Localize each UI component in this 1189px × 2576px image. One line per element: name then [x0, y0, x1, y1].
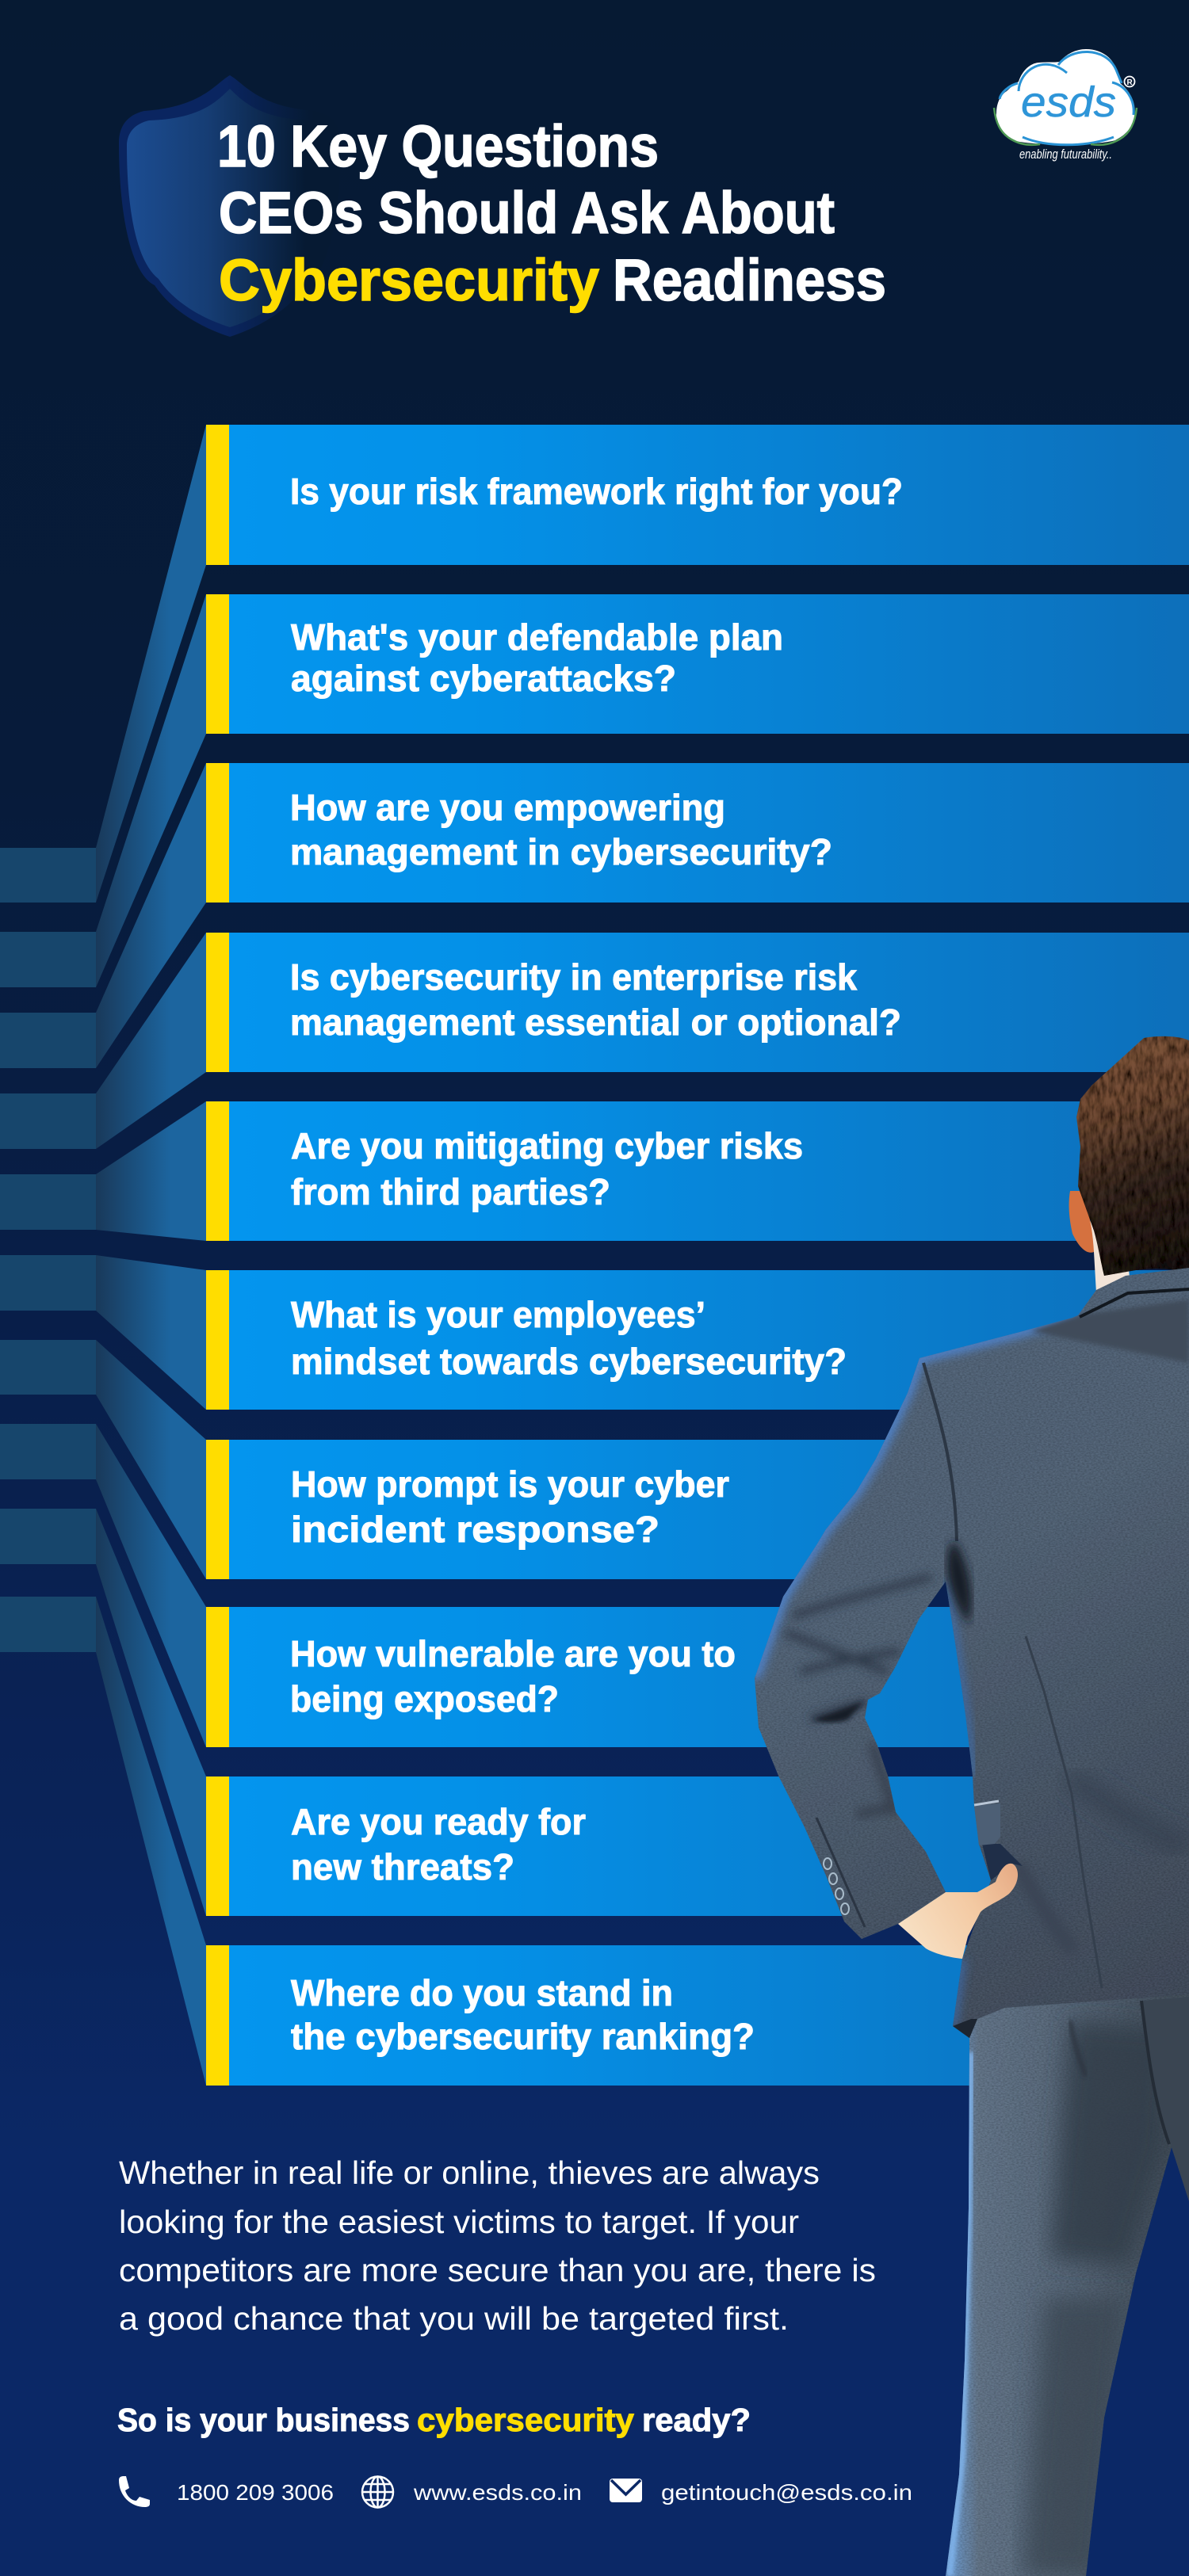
question 7: How prompt is your cyber [291, 1464, 729, 1505]
question 10: the cybersecurity ranking? [291, 2016, 755, 2057]
icon: shield [119, 75, 341, 337]
title: CEOs Should Ask About [219, 180, 835, 246]
question 6 [206, 1270, 1189, 1410]
question 8: being exposed? [290, 1678, 559, 1719]
question 6: What is your employees’ [291, 1294, 705, 1335]
question 2: What's your defendable plan [291, 616, 783, 658]
cloud outline arcs [1000, 52, 1134, 145]
trousers [946, 1981, 1189, 2576]
lining and sleeve vent [974, 1801, 1023, 1880]
question 7: incident response? [291, 1509, 659, 1550]
question 10 [206, 1945, 1189, 2086]
question bars [206, 425, 1189, 2086]
question 3: management in cybersecurity? [290, 831, 832, 872]
title: 10 Key Questions [217, 113, 659, 179]
question 8 [206, 1607, 1189, 1747]
question 5: Are you mitigating cyber risks [291, 1125, 803, 1166]
registered mark: R [1127, 78, 1134, 87]
logo: esds [994, 49, 1137, 162]
question 5: from third parties? [291, 1171, 610, 1212]
contact row [119, 2476, 912, 2508]
call to action: ready? [642, 2402, 751, 2438]
question 4 [206, 933, 1189, 1072]
jacket [755, 1268, 1189, 2038]
question 3: How are you empowering [290, 787, 725, 828]
hand [898, 1864, 1018, 1959]
question 3 [206, 763, 1189, 903]
neck [1088, 1220, 1130, 1293]
cloud [996, 49, 1135, 144]
question 9: new threats? [291, 1846, 514, 1887]
call to action: cybersecurity [417, 2402, 634, 2438]
icon: globe [362, 2476, 393, 2508]
call to action [117, 2402, 751, 2438]
ear [1069, 1191, 1094, 1253]
jacket bottom shadow [953, 2019, 977, 2038]
text: email: getintouch@esds.co.in [661, 2480, 912, 2505]
question 2 [206, 594, 1189, 734]
businessman seen from behind [755, 1036, 1189, 2576]
closing paragraph: competitors are more secure than you are, there is [119, 2252, 876, 2288]
icon: phone [119, 2476, 150, 2507]
question 1: Is your risk framework right for you? [290, 471, 903, 512]
question 7 [206, 1440, 1189, 1579]
closing paragraph [119, 2154, 876, 2337]
closing paragraph: a good chance that you will be targeted first. [119, 2300, 789, 2337]
text: website: www.esds.co.in [413, 2480, 582, 2505]
question 9 [206, 1776, 1189, 1916]
green hands [994, 108, 1137, 145]
question 4: management essential or optional? [290, 1002, 901, 1043]
call to action: So is your business [117, 2402, 410, 2438]
wordmark: esds [1021, 78, 1116, 126]
question 8: How vulnerable are you to [290, 1633, 736, 1674]
icon: mail [610, 2479, 642, 2502]
question 1 [206, 425, 1189, 565]
collar line [1080, 1289, 1189, 1317]
title: Readiness [613, 247, 886, 313]
question 2: against cyberattacks? [291, 658, 676, 699]
hair [1076, 1036, 1189, 1276]
question 10: Where do you stand in [291, 1972, 673, 2013]
closing paragraph: Whether in real life or online, thieves are always [119, 2154, 820, 2191]
question 4: Is cybersecurity in enterprise risk [290, 956, 857, 998]
side blocks and connectors [0, 425, 206, 2086]
title [217, 113, 886, 313]
tagline: enabling futurability.. [1019, 147, 1112, 162]
title: Cybersecurity [219, 247, 599, 313]
sleeve buttons [824, 1858, 849, 1914]
question 9: Are you ready for [291, 1801, 586, 1842]
question 5 [206, 1101, 1189, 1241]
question 6: mindset towards cybersecurity? [291, 1341, 847, 1382]
registered mark [1124, 76, 1135, 87]
text: phone number: 1800 209 3006 [177, 2480, 334, 2505]
closing paragraph: looking for the easiest victims to target. If your [119, 2204, 799, 2240]
